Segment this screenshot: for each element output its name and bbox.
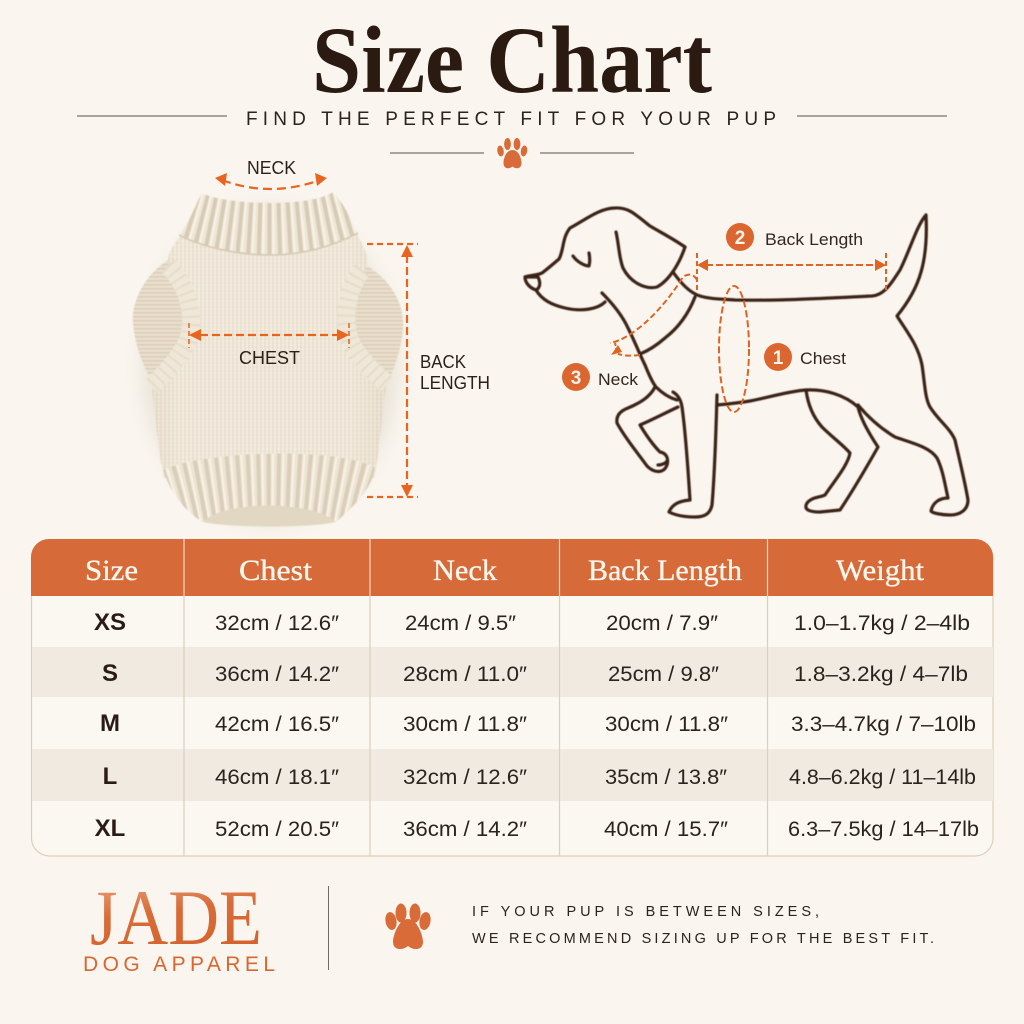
chest measurement arrow — [189, 323, 349, 348]
row: XL: 40cm / 15.7″ — [604, 818, 729, 841]
row: L: L — [103, 763, 117, 790]
badge: chest: 1 — [773, 348, 784, 369]
label: back length — [420, 352, 490, 393]
row: S: 28cm / 11.0″ — [403, 663, 528, 686]
column headings: Chest — [239, 554, 313, 587]
label: neck: NECK — [247, 158, 296, 178]
label: back length: LENGTH — [420, 373, 490, 393]
back length measurement arrow — [367, 244, 418, 497]
panel: sweater diagram — [133, 158, 490, 530]
row: L — [103, 763, 976, 790]
chest loop — [719, 286, 749, 412]
label: neck: Neck — [598, 370, 639, 389]
column headings: Back Length — [588, 554, 742, 587]
row: XL: XL — [95, 815, 125, 842]
row: M — [100, 710, 976, 737]
row: M: 30cm / 11.8″ — [605, 713, 729, 736]
sweater photo — [133, 185, 403, 530]
row: M: 42cm / 16.5″ — [215, 713, 340, 736]
brand logo: JADE — [90, 874, 262, 961]
row: L: 35cm / 13.8″ — [605, 766, 728, 789]
row: XL: 36cm / 14.2″ — [403, 818, 528, 841]
icon: header paw — [496, 138, 528, 168]
label: back length: BACK — [420, 352, 466, 372]
dog outline — [525, 208, 968, 517]
badge: back length: 2 — [735, 228, 745, 249]
row: XL: 52cm / 20.5″ — [215, 818, 340, 841]
row: XS: 1.0–1.7kg / 2–4lb — [794, 612, 970, 635]
back length arrow — [697, 253, 886, 292]
size table — [31, 539, 993, 856]
row: M: 3.3–4.7kg / 7–10lb — [791, 713, 976, 736]
badge: chest — [764, 343, 792, 371]
row: M: M — [100, 710, 120, 737]
row: S: 1.8–3.2kg / 4–7lb — [794, 663, 968, 686]
row: XS: 24cm / 9.5″ — [405, 612, 517, 635]
row: L: 32cm / 12.6″ — [403, 766, 528, 789]
badge: neck: 3 — [571, 368, 581, 389]
row: XL — [95, 815, 979, 842]
row: XS: 32cm / 12.6″ — [215, 612, 340, 635]
footer note — [472, 904, 934, 947]
table header — [31, 539, 993, 596]
label: chest: CHEST — [239, 348, 300, 368]
row: L: 46cm / 18.1″ — [215, 766, 340, 789]
badge: neck — [562, 363, 590, 391]
panel: dog diagram — [525, 208, 968, 517]
row: S — [102, 660, 968, 687]
column headings: Size — [85, 554, 138, 587]
row: S: 25cm / 9.8″ — [608, 663, 720, 686]
row: XS: XS — [94, 609, 126, 636]
label: back length: Back Length — [765, 230, 863, 249]
footer note: IF YOUR PUP IS BETWEEN SIZES, — [472, 904, 819, 920]
label: chest: Chest — [800, 349, 846, 368]
row: S: 36cm / 14.2″ — [215, 663, 340, 686]
footer note: WE RECOMMEND SIZING UP FOR THE BEST FIT. — [472, 931, 934, 947]
row: L: 4.8–6.2kg / 11–14lb — [789, 766, 976, 789]
badge: back length — [726, 223, 754, 251]
table body — [32, 540, 993, 856]
neck measurement arrow — [215, 173, 327, 189]
icon: footer paw — [384, 904, 432, 949]
title: Size Chart — [312, 7, 712, 113]
row: XS: 20cm / 7.9″ — [606, 612, 719, 635]
row: XS — [94, 609, 970, 636]
table stripes — [32, 647, 993, 801]
subtitle: FIND THE PERFECT FIT FOR YOUR PUP — [246, 109, 776, 130]
neck loop arrow — [610, 275, 697, 356]
column headings — [85, 554, 925, 587]
column headings: Neck — [433, 554, 497, 587]
row: XL: 6.3–7.5kg / 14–17lb — [788, 818, 979, 841]
brand logo: DOG APPAREL — [83, 953, 275, 976]
row: M: 30cm / 11.8″ — [403, 713, 528, 736]
row: S: S — [102, 660, 118, 687]
column headings: Weight — [836, 554, 925, 587]
